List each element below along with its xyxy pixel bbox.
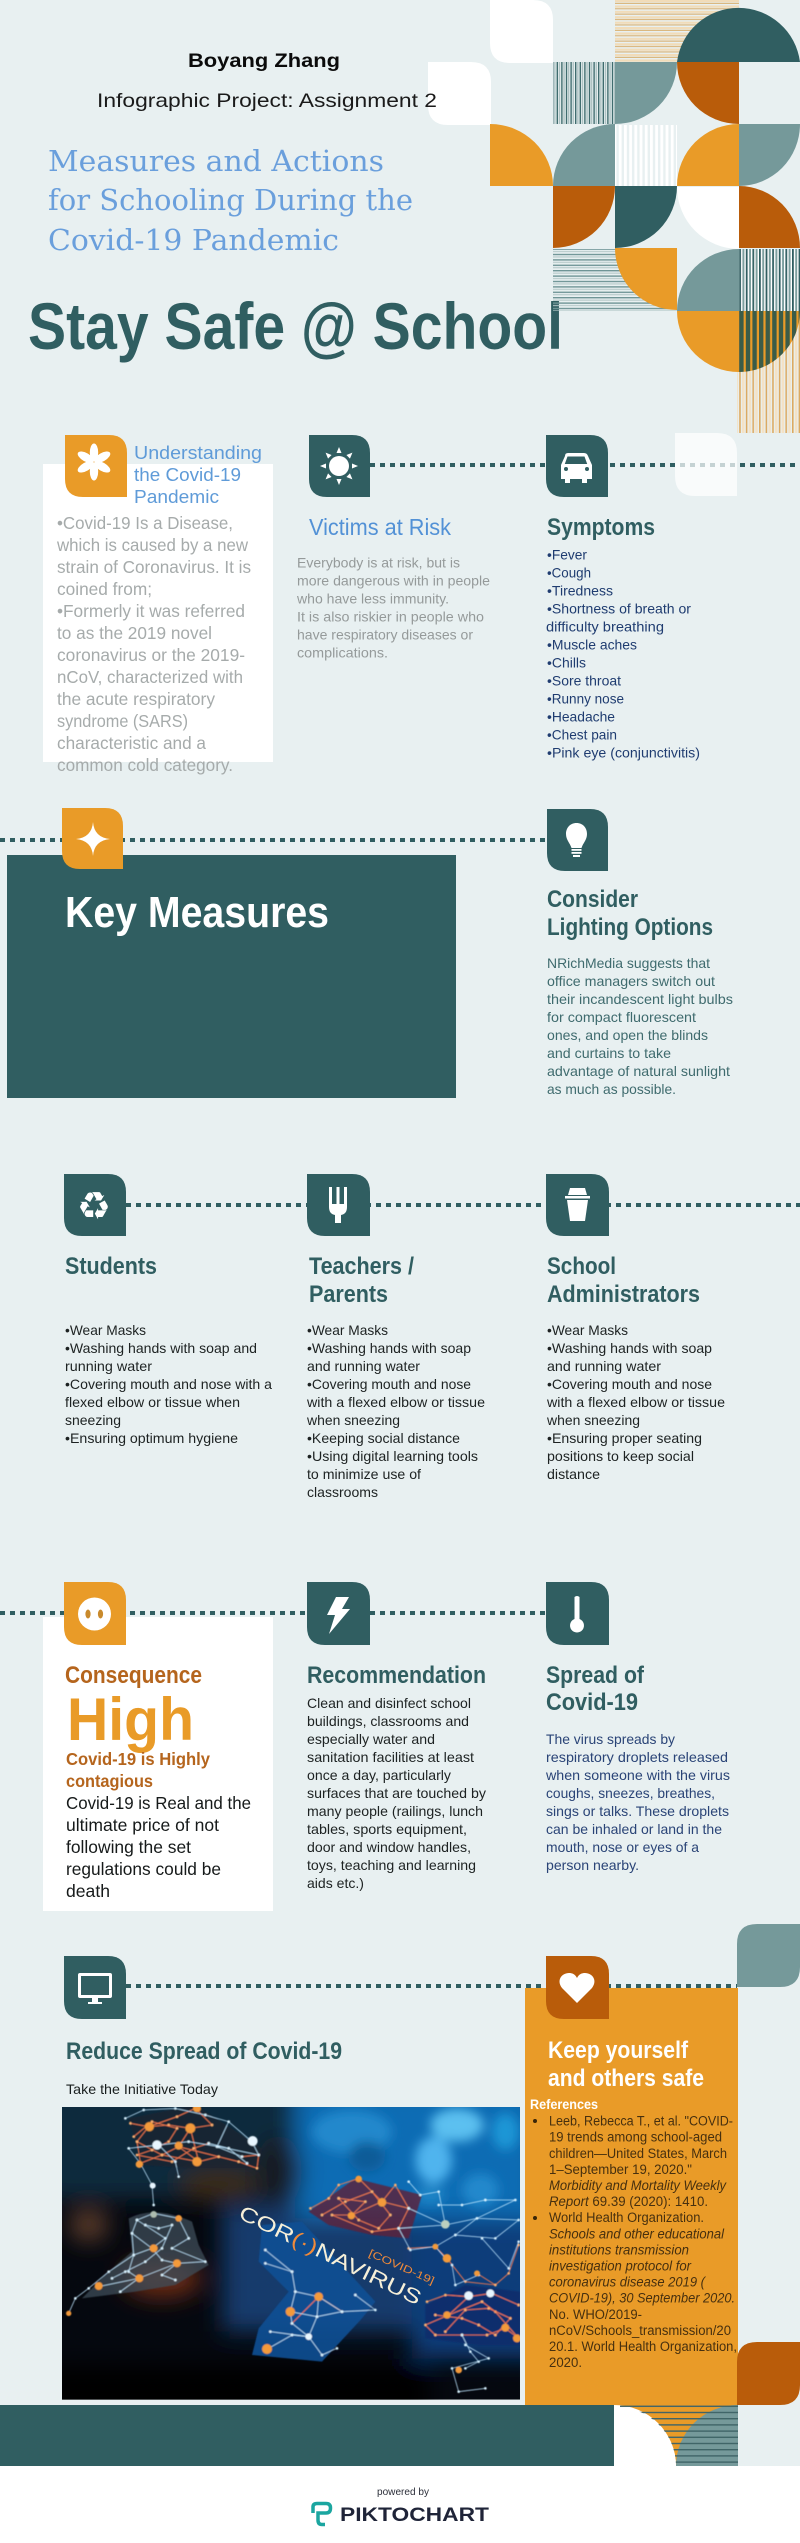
list: administrator measures: distance xyxy=(547,1466,600,1482)
heading: keep yourself safe: and others safe xyxy=(548,2065,704,2092)
list: symptoms: •Headache xyxy=(547,708,615,724)
icon: asterisk xyxy=(65,435,127,497)
text: consequence description: regulations could be xyxy=(66,1859,221,1879)
list: symptoms: •Sore throat xyxy=(547,672,621,688)
panel: teachers and parents: Parents xyxy=(309,1281,388,1308)
list: references: children—United States, March xyxy=(549,2146,727,2161)
subheading: highly contagious: Covid-19 is Highly xyxy=(66,1749,210,1769)
text: consequence description: following the set xyxy=(66,1837,191,1857)
footer band xyxy=(0,2405,738,2466)
panel: spread of covid-19 xyxy=(545,1582,730,1873)
heading: spread of covid-19: Spread of xyxy=(546,1662,645,1689)
panel: spread of covid-19: Covid-19 xyxy=(546,1689,638,1716)
list: references: Report 69.39 (2020): 1410. xyxy=(549,2194,708,2209)
network edges: orange xyxy=(130,2108,519,2338)
list: symptoms: difficulty breathing xyxy=(546,618,664,634)
header: author and project xyxy=(97,51,437,112)
text: lighting advice: for compact fluorescent xyxy=(547,1009,696,1025)
list: references: 19 trends among school-aged xyxy=(549,2130,722,2145)
icon: face xyxy=(64,1582,126,1645)
text: lighting advice: advantage of natural sunlight xyxy=(547,1063,730,1079)
heading: understanding: Understanding xyxy=(134,443,262,463)
subtitle xyxy=(48,144,413,257)
heading: references: References xyxy=(530,2096,598,2112)
subtitle: for Schooling During the xyxy=(48,183,413,217)
list: references: 2020. xyxy=(549,2355,582,2370)
connector: audience row dotted line xyxy=(126,1203,800,1207)
text: how the virus spreads: person nearby. xyxy=(546,1857,639,1873)
text: recommendation details: sanitation facilities at least xyxy=(307,1749,474,1765)
icon: recycling: ♻ xyxy=(77,1184,111,1228)
heading: lighting options: Consider xyxy=(547,886,638,913)
text: disease description: syndrome (SARS) xyxy=(57,711,188,731)
footer branding xyxy=(313,2486,489,2526)
heading: victims: Victims at Risk xyxy=(309,514,451,540)
list: administrator measures: •Wear Masks xyxy=(547,1322,628,1338)
text: disease description: •Covid-19 Is a Disease, xyxy=(57,513,233,533)
list: student measures: •Wear Masks xyxy=(65,1322,146,1338)
list: references: institutions transmission xyxy=(549,2242,689,2257)
list: administrator measures: when sneezing xyxy=(546,1412,640,1428)
text: risk description: It is also riskier in people who xyxy=(297,608,484,624)
list: student measures: •Washing hands with soap and xyxy=(65,1340,257,1356)
list: references: 1–September 19, 2020." xyxy=(549,2162,692,2177)
image caption text: COR(·)NAVIRUS xyxy=(235,2201,425,2310)
text: how the virus spreads: can be inhaled or land in the xyxy=(546,1821,722,1837)
text: recommendation details: Clean and disinfect school xyxy=(307,1695,471,1711)
network hubs xyxy=(66,2104,521,2373)
list: symptoms: •Chest pain xyxy=(547,726,617,742)
text: consequence description: ultimate price of not xyxy=(66,1815,219,1835)
icon: fork xyxy=(307,1174,370,1236)
text: recommendation details: surfaces that are touched by xyxy=(307,1785,486,1801)
subtitle: Covid-19 Pandemic xyxy=(48,223,339,257)
list: student measures: sneezing xyxy=(65,1412,121,1428)
list: teacher measures: •Keeping social distance xyxy=(307,1430,460,1446)
heading: reduce spread: Reduce Spread of Covid-19 xyxy=(66,2038,342,2065)
list: teacher measures: •Using digital learning tools xyxy=(307,1448,478,1464)
list: administrator measures: •Ensuring proper seating xyxy=(547,1430,702,1446)
list: administrator measures xyxy=(546,1322,725,1482)
list: symptoms: •Chills xyxy=(547,654,586,670)
list: references: Schools and other educational xyxy=(549,2226,725,2241)
text: disease description: coined from; xyxy=(57,579,152,599)
list: student measures xyxy=(65,1322,272,1446)
text: consequence description: Covid-19 is Real and the xyxy=(66,1793,251,1813)
heading: keep yourself safe xyxy=(548,2037,704,2092)
text: consequence description: death xyxy=(66,1881,110,1901)
list: symptoms: •Pink eye (conjunctivitis) xyxy=(547,744,700,760)
text: lighting advice: NRichMedia suggests that xyxy=(547,955,710,971)
panel: consequence xyxy=(64,1582,251,1901)
list: references: Morbidity and Mortality Weekly xyxy=(549,2178,727,2193)
text: recommendation details: door and window handles, xyxy=(307,1839,471,1855)
powered by label: powered by xyxy=(377,2486,430,2498)
text: recommendation details: buildings, classrooms and xyxy=(307,1713,469,1729)
list: student measures: •Covering mouth and nose with a xyxy=(65,1376,272,1392)
text: lighting advice: ones, and open the blinds xyxy=(547,1027,708,1043)
image: coronavirus world map: [COVID-19] xyxy=(367,2248,436,2287)
text: recommendation details: toys, teaching and learning xyxy=(307,1857,476,1873)
connector: first row dotted line xyxy=(370,463,800,467)
author name: Boyang Zhang xyxy=(188,51,340,72)
subheading: highly contagious: contagious xyxy=(66,1771,153,1791)
panel: teachers and parents xyxy=(306,1174,485,1500)
text: lighting advice xyxy=(547,955,733,1097)
list: student measures: •Ensuring optimum hygiene xyxy=(65,1430,238,1446)
text: risk description: Everybody is at risk, but is xyxy=(297,554,460,570)
decorative geometric pattern xyxy=(490,0,800,433)
text: disease description: which is caused by a new xyxy=(56,535,248,555)
text: recommendation details: aids etc.) xyxy=(307,1875,364,1891)
heading: understanding: the Covid-19 xyxy=(134,465,241,485)
text: risk description: complications. xyxy=(297,644,388,660)
list: symptoms: •Fever xyxy=(547,546,587,562)
text: recommendation details xyxy=(307,1695,486,1891)
list: references: World Health Organization. xyxy=(549,2210,704,2225)
panel: recommendation xyxy=(307,1582,486,1891)
text: how the virus spreads: mouth, nose or eyes of a xyxy=(546,1839,699,1855)
image: coronavirus world map xyxy=(62,2107,520,2400)
tagline: Take the Initiative Today xyxy=(66,2081,218,2097)
list: administrator measures: and running water xyxy=(547,1358,661,1374)
list: symptoms: •Cough xyxy=(547,564,591,580)
icon: heart xyxy=(546,1956,609,2019)
list: symptoms xyxy=(546,546,700,760)
list: references: Leeb, Rebecca T., et al. "COVID- xyxy=(549,2114,733,2129)
wordmark: PIKTOCHART xyxy=(340,2505,489,2526)
panel: key measures xyxy=(7,808,456,1098)
text: how the virus spreads: coughs, sneezes, breathes, xyxy=(546,1785,715,1801)
list: references xyxy=(533,2114,737,2370)
icon: lightning bolt xyxy=(307,1582,370,1645)
text: disease description: strain of Coronavirus. It is xyxy=(57,557,251,577)
list: references: 20.1. World Health Organization, xyxy=(549,2339,737,2354)
decorative dark orange tile xyxy=(737,2342,800,2405)
heading: symptoms: Symptoms xyxy=(547,514,655,541)
text: risk description xyxy=(296,554,490,660)
project name: Infographic Project: Assignment 2 xyxy=(97,90,437,112)
icon: sparkle xyxy=(62,808,123,869)
text: consequence description xyxy=(66,1793,251,1901)
heading: understanding xyxy=(134,443,262,507)
heading: key measures: Key Measures xyxy=(65,888,329,937)
text: how the virus spreads: The virus spreads by xyxy=(546,1731,675,1747)
list: teacher measures: to minimize use of xyxy=(307,1466,421,1482)
panel: lighting options xyxy=(547,809,733,1097)
connector: bottom row dotted line xyxy=(126,1984,737,1988)
text: how the virus spreads xyxy=(545,1731,730,1873)
list: references: COVID-19), 30 September 2020. xyxy=(549,2291,735,2306)
icon: sun xyxy=(309,435,370,497)
panel: understanding covid xyxy=(56,435,262,775)
heading: school administrators: School xyxy=(547,1253,616,1280)
text: disease description: the acute respiratory xyxy=(57,689,215,709)
list: references: nCoV/Schools_transmission/20 xyxy=(549,2323,731,2338)
panel: consequence background xyxy=(43,1617,273,1911)
list: references: coronavirus disease 2019 ( xyxy=(549,2275,706,2290)
decorative white tiles behind header xyxy=(428,0,553,125)
text: how the virus spreads: when someone with the virus xyxy=(545,1767,730,1783)
panel: lighting options: Lighting Options xyxy=(547,914,713,941)
icon: cup xyxy=(546,1174,609,1236)
icon: recycling xyxy=(64,1174,126,1236)
text: lighting advice: as much as possible. xyxy=(547,1081,676,1097)
panel: keep yourself safe xyxy=(525,1956,738,2405)
continents xyxy=(82,2212,209,2298)
list: symptoms: •Tiredness xyxy=(547,582,613,598)
text: risk description: have respiratory diseases or xyxy=(297,626,473,642)
rating: high: High xyxy=(67,1686,194,1753)
list: references: No. WHO/2019- xyxy=(549,2307,642,2322)
text: recommendation details: tables, sports equipment, xyxy=(307,1821,467,1837)
panel: students xyxy=(64,1174,272,1446)
list: teacher measures: •Washing hands with soap xyxy=(307,1340,471,1356)
text: disease description: to as the 2019 novel xyxy=(57,623,212,643)
panel: victims at risk xyxy=(296,435,490,660)
list: symptoms: •Runny nose xyxy=(547,690,624,706)
list: symptoms: •Muscle aches xyxy=(547,636,637,652)
list: teacher measures: •Covering mouth and nose xyxy=(307,1376,471,1392)
text: disease description: characteristic and a xyxy=(57,733,206,753)
list: teacher measures: •Wear Masks xyxy=(307,1322,388,1338)
icon: piktochart logo xyxy=(313,2504,330,2524)
text: lighting advice: office managers switch out xyxy=(547,973,715,989)
text: recommendation details: especially water and xyxy=(307,1731,435,1747)
text: risk description: who have less immunity. xyxy=(296,590,449,606)
decorative grey tile xyxy=(737,1924,800,1987)
panel: school administrators xyxy=(546,1174,725,1482)
panel: reduce spread xyxy=(62,1956,520,2400)
icon: car xyxy=(546,435,608,497)
heading: students: Students xyxy=(65,1253,157,1280)
icon: monitor xyxy=(64,1956,126,2019)
text: risk description: more dangerous with in people xyxy=(297,572,490,588)
connector: consequence row dotted line xyxy=(0,1611,547,1615)
list: administrator measures: •Covering mouth and nose xyxy=(547,1376,712,1392)
text: lighting advice: their incandescent light bulbs xyxy=(547,991,733,1007)
icon: thermometer xyxy=(546,1582,609,1645)
list: administrator measures: positions to keep social xyxy=(547,1448,694,1464)
text: disease description: common cold category. xyxy=(57,755,233,775)
list: administrator measures: with a flexed elbow or tissue xyxy=(546,1394,725,1410)
list: symptoms: •Shortness of breath or xyxy=(547,600,691,616)
list: teacher measures: and running water xyxy=(307,1358,420,1374)
panel: symptoms xyxy=(546,435,700,760)
list: teacher measures: with a flexed elbow or tissue xyxy=(306,1394,485,1410)
text: lighting advice: and curtains to take xyxy=(547,1045,671,1061)
main title: Stay Safe @ School xyxy=(28,289,563,363)
text: disease description: •Formerly it was referred xyxy=(57,601,245,621)
subheading: highly contagious xyxy=(66,1749,210,1791)
text: how the virus spreads: respiratory droplets released xyxy=(546,1749,728,1765)
text: disease description xyxy=(56,513,251,775)
heading: teachers and parents: Teachers / xyxy=(309,1253,414,1280)
text: disease description: coronavirus or the 2019- xyxy=(57,645,245,665)
panel: school administrators: Administrators xyxy=(547,1281,700,1308)
text: how the virus spreads: sings or talks. These droplets xyxy=(546,1803,729,1819)
subtitle: Measures and Actions xyxy=(48,144,384,178)
text: recommendation details: many people (railings, lunch xyxy=(307,1803,483,1819)
list: references: investigation protocol for xyxy=(549,2258,691,2274)
heading: understanding: Pandemic xyxy=(134,487,219,507)
panel: understanding background xyxy=(43,464,273,762)
list: teacher measures: classrooms xyxy=(307,1484,378,1500)
connector: key measures dotted line xyxy=(0,838,547,842)
list: student measures: running water xyxy=(65,1358,152,1374)
heading: recommendation: Recommendation xyxy=(307,1662,486,1689)
heading: consequence: Consequence xyxy=(65,1662,202,1689)
list: administrator measures: •Washing hands with soap xyxy=(547,1340,712,1356)
list: student measures: flexed elbow or tissue when xyxy=(65,1394,240,1410)
network edges: white and blue xyxy=(69,2108,519,2392)
list: teacher measures: when sneezing xyxy=(306,1412,400,1428)
list: teacher measures xyxy=(306,1322,485,1500)
translucent decorative tile xyxy=(675,433,737,496)
text: recommendation details: once a day, particularly xyxy=(307,1767,451,1783)
text: disease description: nCoV, characterized with xyxy=(57,667,243,687)
icon: light bulb xyxy=(547,809,608,871)
heading: keep yourself safe: Keep yourself xyxy=(548,2037,689,2064)
